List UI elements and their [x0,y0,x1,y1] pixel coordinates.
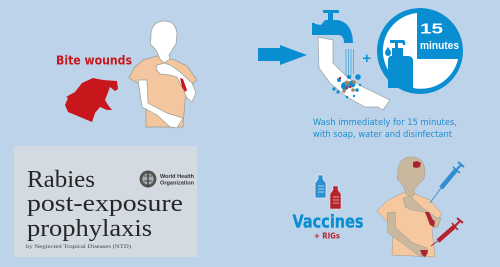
icon: blue vaccine vial [315,175,326,198]
icon: soap bubbles and germs [332,74,361,98]
icon: red syringe [431,218,463,246]
wash instructions text: with soap, water and disinfectant [313,130,453,140]
WHO emblem [140,170,156,188]
icon: 15 minutes clock with soap [377,8,463,94]
clock disc [377,8,463,94]
heading: vaccines: Vaccines [292,212,364,232]
15: 15 [420,22,443,38]
figure: bitten person [129,21,197,128]
head wound [413,161,421,168]
hand wound [420,250,428,257]
bite wound [180,78,187,92]
wash instructions text: Wash immediately for 15 minutes, [313,118,457,128]
icon: water stream [346,49,354,80]
icon: snarling dog head [65,78,118,122]
treated person head [397,157,425,198]
WHO name: World Health [160,174,195,180]
figure: treated person [377,157,442,257]
subheading: RIGs: + RIGs [314,232,340,240]
subtitle: by Neglected Tropical Diseases (NTD) [26,243,131,250]
treated person raised arm [403,196,441,227]
clock face [383,13,458,89]
WHO name: Organization [160,180,195,186]
treated person shirt [377,192,442,257]
arm wound [425,212,435,227]
icon: red vaccine vial [330,186,341,209]
icon: arm being washed [318,37,390,110]
person shirt [129,56,197,127]
treated person lower arm [387,212,428,257]
person head [150,21,177,63]
person left arm [138,80,183,128]
title: Rabies [27,167,95,193]
icon: blue syringe [430,162,464,203]
title: post-exposure [27,191,183,217]
WHO name [160,174,195,186]
soap bottle [388,40,413,88]
person right arm holding bitten forearm [156,63,196,102]
soap drop [385,47,391,56]
title [27,167,183,242]
wash instructions text [313,118,457,140]
heading: bite wounds: Bite wounds [56,54,132,68]
minutes: minutes [420,40,459,52]
title: prophylaxis [27,216,152,242]
icon: plus sign [363,54,370,62]
icon: water tap [312,10,353,43]
title panel [14,146,197,257]
arrow [258,45,307,65]
